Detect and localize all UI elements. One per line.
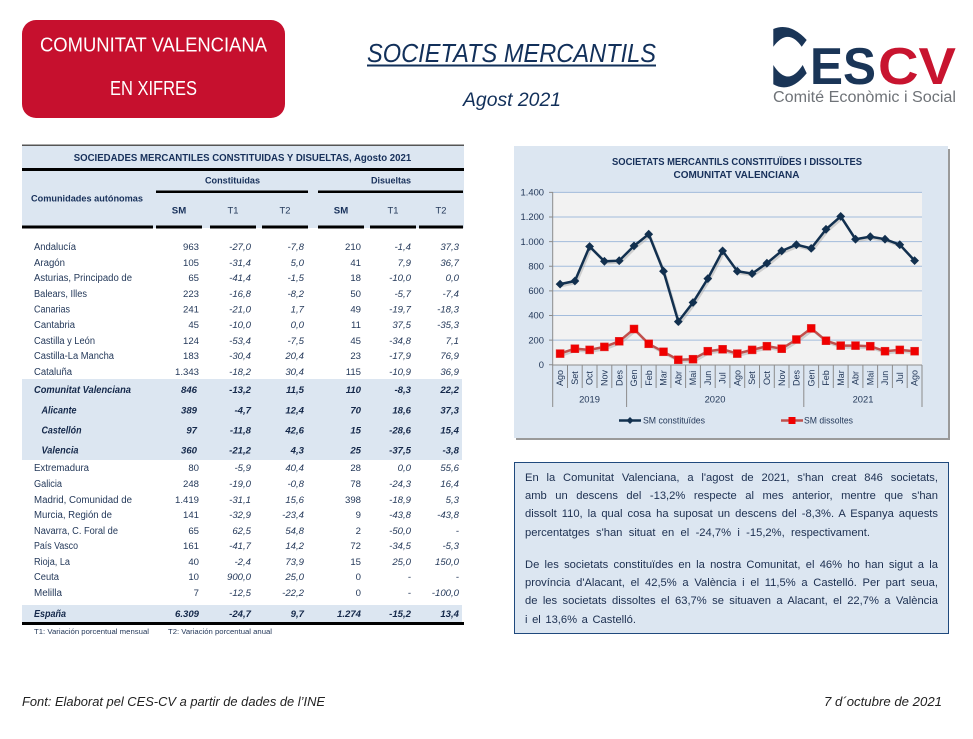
x axis year labels xyxy=(579,394,873,404)
row: Cantabria: -10,0 xyxy=(229,320,252,331)
row: País Vasco: 161 xyxy=(183,541,199,552)
row: Asturias: Asturias, Principado de xyxy=(34,273,132,284)
row: Galicia: 78 xyxy=(350,479,361,490)
row: Melilla: 7 xyxy=(194,588,199,599)
x axis month labels: Abr xyxy=(673,371,683,385)
y axis labels xyxy=(521,186,544,370)
logo: CES-CV xyxy=(773,27,956,106)
legend xyxy=(619,416,853,426)
row: Madrid: 5,3 xyxy=(446,495,460,506)
row: Murcia xyxy=(34,510,460,521)
row: Castellón: 15,4 xyxy=(440,426,460,436)
row: Aragón: 105 xyxy=(183,258,199,269)
row: Andalucía: Andalucía xyxy=(34,242,76,253)
row: Murcia: 141 xyxy=(183,510,199,521)
y axis labels: 1.000 xyxy=(521,236,544,247)
table header: SM xyxy=(334,206,348,216)
row: Balears: -7,4 xyxy=(442,289,459,300)
row: Madrid: 15,6 xyxy=(285,495,305,506)
text panel: commentary: i el 13,6% a Castelló. xyxy=(525,614,636,626)
y axis labels: 1.200 xyxy=(521,211,544,222)
row: Castellón: 97 xyxy=(186,426,198,436)
row: Canarias xyxy=(34,304,460,316)
row: Alicante: Alicante xyxy=(41,406,77,416)
table note: T2: Variación porcentual anual xyxy=(168,627,272,636)
row: Aragón: 7,9 xyxy=(398,258,412,269)
y axis labels: 600 xyxy=(528,285,544,296)
row: Comunitat Valenciana: 11,5 xyxy=(286,385,305,396)
row: Balears: 223 xyxy=(183,289,199,300)
row: Aragón: 41 xyxy=(350,258,361,269)
row: Navarra: - xyxy=(456,526,459,537)
row: Asturias: -41,4 xyxy=(229,273,251,284)
row: Galicia: 248 xyxy=(183,479,199,490)
row: Canarias: Canarias xyxy=(34,304,70,316)
row: Castilla y León xyxy=(34,336,459,347)
row: Ceuta: - xyxy=(456,572,459,583)
row: País Vasco: -41,7 xyxy=(229,541,252,552)
row: Castilla-La Mancha: 76,9 xyxy=(440,351,460,362)
y axis labels: 1.400 xyxy=(521,186,544,198)
row: Balears: -5,7 xyxy=(394,289,412,300)
row: Melilla xyxy=(34,588,460,599)
line series: SM dissolved xyxy=(560,328,916,362)
row: Ceuta xyxy=(34,572,459,583)
highlight band: España xyxy=(22,605,462,622)
row: España xyxy=(34,609,460,620)
row: Cataluña xyxy=(34,367,460,378)
x axis month labels: Jul xyxy=(895,372,905,384)
row: Valencia: -37,5 xyxy=(389,446,412,456)
x axis month labels: Mai xyxy=(865,371,875,385)
x axis month labels: Nov xyxy=(777,370,787,386)
row: Aragón xyxy=(34,258,460,269)
row: Castilla-La Mancha: 183 xyxy=(183,351,199,362)
row: Navarra: 2 xyxy=(356,526,361,537)
row: Alicante xyxy=(41,406,460,416)
row: Alicante: 70 xyxy=(350,406,362,416)
row: Ceuta: 900,0 xyxy=(227,572,252,583)
row: Cataluña: 30,4 xyxy=(285,367,304,378)
row: Melilla: Melilla xyxy=(34,588,62,599)
row: Ceuta: 10 xyxy=(188,572,199,583)
text panel: commentary: de les societats dissoltes el 63,7% se situaven a Alacant, el 22,7% a València xyxy=(525,595,938,607)
row: Murcia: -43,8 xyxy=(437,510,460,521)
header badge: Comunitat Valenciana en xifres xyxy=(22,20,285,118)
row: Comunitat Valenciana xyxy=(34,385,460,396)
row: Rioja: 40 xyxy=(188,557,199,568)
plot area xyxy=(553,192,922,365)
row: Canarias: -21,0 xyxy=(229,304,252,316)
row: Castellón xyxy=(42,426,460,436)
row: Andalucía: -1,4 xyxy=(394,242,411,253)
line series: SM constituted xyxy=(560,216,916,324)
row: Extremadura xyxy=(34,463,460,474)
x axis month labels: Nov xyxy=(600,370,610,386)
footer: source: Font: Elaborat pel CES-CV a partir de dades de l’INE xyxy=(22,694,325,709)
chart title xyxy=(612,157,862,181)
x axis month labels: Jun xyxy=(703,371,713,385)
row: Navarra: -50,0 xyxy=(389,526,412,537)
y axis labels: 800 xyxy=(528,260,544,272)
row: Rioja: 73,9 xyxy=(285,557,305,568)
row: Cantabria: 0,0 xyxy=(291,320,305,331)
text panel: commentary: De les societats constituïdes en la nostra Comunitat, el 46% ho han sigut a la xyxy=(525,559,938,571)
row: Murcia: 9 xyxy=(356,510,361,521)
x axis month labels: Set xyxy=(747,371,757,385)
text panel: commentary: amb un descens del -13,2% respecte al mes anterior, mentre que s'han xyxy=(525,490,938,502)
x axis month labels: Oct xyxy=(762,371,772,385)
row: Ceuta: - xyxy=(408,572,411,583)
row: Castilla y León: 7,1 xyxy=(446,336,459,347)
logo: CES-CV: Comité Econòmic i Social xyxy=(773,89,956,106)
x axis month labels xyxy=(555,369,920,387)
table header: SOCIEDADES MERCANTILES CONSTITUIDAS Y DISUELTAS, Agosto 2021 xyxy=(74,153,411,164)
row: Madrid: 1.419 xyxy=(175,495,199,506)
row: Cataluña: 36,9 xyxy=(440,367,460,378)
row: Rioja: 150,0 xyxy=(435,557,460,568)
y axis labels: 400 xyxy=(528,310,544,321)
row: Andalucía: -7,8 xyxy=(287,242,305,253)
row: Valencia xyxy=(42,446,460,456)
row: Valencia: Valencia xyxy=(42,446,79,456)
x axis month labels: Des xyxy=(614,370,624,386)
row: España: 1.274 xyxy=(337,609,362,620)
logo: CES-CV: ES xyxy=(810,38,876,96)
table header: Disueltas xyxy=(371,176,411,186)
row: Castellón: Castellón xyxy=(42,426,82,436)
table panel: sociedades mercantiles xyxy=(22,144,464,636)
row: Extremadura: 55,6 xyxy=(440,463,460,474)
x axis month labels: Gen xyxy=(629,369,639,387)
bottom rule xyxy=(22,622,464,625)
row: España: -15,2 xyxy=(389,609,412,620)
row: Andalucía xyxy=(34,242,460,253)
legend: SM constituïdes xyxy=(643,416,705,426)
row: Aragón: -31,4 xyxy=(229,258,251,269)
row: Cantabria xyxy=(34,320,460,331)
row: Ceuta: 0 xyxy=(356,572,361,583)
row: Cantabria: Cantabria xyxy=(34,320,75,331)
row: Rioja: 15 xyxy=(350,557,361,568)
row: Alicante: 18,6 xyxy=(392,406,412,416)
row: Extremadura: 28 xyxy=(350,463,361,474)
row: Galicia: -24,3 xyxy=(389,479,412,490)
y axis labels: 200 xyxy=(528,334,544,345)
row: Canarias: -19,7 xyxy=(389,304,412,316)
row: Madrid: -31,1 xyxy=(229,495,251,506)
text panel: commentary: En la Comunitat Valenciana, a l'agost de 2021, s'han creat 846 societats, xyxy=(525,472,938,484)
row: Alicante: 37,3 xyxy=(440,406,460,416)
row: Cataluña: 115 xyxy=(346,367,361,378)
y axis labels: 0 xyxy=(539,359,544,370)
row: Cataluña: -18,2 xyxy=(229,367,252,378)
legend: SM dissoltes xyxy=(804,416,853,426)
row: Madrid: Madrid, Comunidad de xyxy=(34,495,132,506)
x axis month labels: Mar xyxy=(836,370,846,386)
row: Extremadura: 40,4 xyxy=(285,463,304,474)
row: Balears: -16,8 xyxy=(229,289,252,300)
row: Castellón: 42,6 xyxy=(284,426,305,436)
row: Extremadura: 80 xyxy=(188,463,199,474)
row: Aragón: 36,7 xyxy=(440,258,460,269)
row: Extremadura: 0,0 xyxy=(398,463,412,474)
x axis month labels: Set xyxy=(570,371,580,385)
row: Cantabria: 37,5 xyxy=(392,320,412,331)
row: Ceuta: Ceuta xyxy=(34,572,59,583)
x axis year labels: 2020 xyxy=(705,394,725,404)
row: Canarias: 1,7 xyxy=(291,304,305,316)
table header: T2 xyxy=(436,204,446,216)
row: Asturias: -1,5 xyxy=(287,273,305,284)
row: Murcia: -32,9 xyxy=(229,510,252,521)
chart panel: societats constituïdes i dissoltes xyxy=(514,146,950,440)
row: Castilla-La Mancha: -30,4 xyxy=(229,351,251,362)
table header xyxy=(22,144,464,228)
table header: SM xyxy=(172,206,186,216)
x axis month labels: Gen xyxy=(806,369,816,387)
main title: SOCIETATS MERCANTILS xyxy=(367,38,657,68)
row: Alicante: 12,4 xyxy=(285,406,305,416)
text panel: commentary: percentatges s'han situat en el -24,7% i -15,2%, respectivament. xyxy=(525,527,870,539)
row: Valencia: 4,3 xyxy=(290,446,305,456)
row: Castilla y León: -53,4 xyxy=(229,336,251,347)
row: Comunitat Valenciana: Comunitat Valenciana xyxy=(34,385,131,396)
row: Rioja: 25,0 xyxy=(391,557,412,568)
row: Comunitat Valenciana: 846 xyxy=(181,385,198,396)
row: Madrid xyxy=(34,495,460,506)
row: Castilla y León: -34,8 xyxy=(389,336,412,347)
row: Navarra xyxy=(34,526,459,537)
text panel: commentary xyxy=(514,462,949,634)
row: Andalucía: 210 xyxy=(345,242,361,253)
row: Castellón: 15 xyxy=(350,426,362,436)
text panel: commentary: dissolt 110, la qual cosa ha suposat un descens del -8,3%. A Espanya aquests xyxy=(525,508,938,520)
row: Galicia: 16,4 xyxy=(440,479,459,490)
row: Canarias: -18,3 xyxy=(437,304,460,316)
x axis month labels: Jul xyxy=(718,372,728,384)
chart title: COMUNITAT VALENCIANA xyxy=(674,170,800,181)
row: Melilla: -22,2 xyxy=(282,588,305,599)
row: Rioja: -2,4 xyxy=(234,557,251,568)
row: Castilla-La Mancha: -17,9 xyxy=(389,351,412,362)
row: Rioja xyxy=(34,557,460,568)
table note xyxy=(34,627,272,636)
table header: Comunidades autónomas xyxy=(31,194,143,204)
row: Castilla y León: 124 xyxy=(183,336,200,347)
row: Madrid: -18,9 xyxy=(389,495,412,506)
row: Castilla y León: 45 xyxy=(350,336,361,347)
row: Alicante: -4,7 xyxy=(234,406,252,416)
x axis month labels: Des xyxy=(792,370,802,386)
row: Extremadura: Extremadura xyxy=(34,463,89,474)
logo: CES-CV: CV xyxy=(878,38,956,96)
row: País Vasco: 14,2 xyxy=(285,541,305,552)
row: Valencia: 25 xyxy=(349,446,362,456)
x axis month labels: Ago xyxy=(555,370,565,386)
row: Murcia: Murcia, Región de xyxy=(34,510,112,521)
x axis month labels: Jun xyxy=(880,371,890,385)
x axis month labels: Feb xyxy=(821,370,831,386)
row: Galicia: -0,8 xyxy=(287,479,305,490)
row: País Vasco: País Vasco xyxy=(34,541,78,552)
row: Castilla-La Mancha: Castilla-La Mancha xyxy=(34,351,114,362)
x axis year labels: 2021 xyxy=(853,394,873,404)
row: Balears: Balears, Illes xyxy=(34,289,87,300)
row: País Vasco: -34,5 xyxy=(389,541,412,552)
text panel: commentary: província d'Alacant, el 42,5% a València i el 11,5% a Castelló. Per part seua, xyxy=(525,577,938,589)
row: Cataluña: 1.343 xyxy=(175,367,199,378)
row: España: 6.309 xyxy=(175,609,200,620)
row: Rioja: Rioja, La xyxy=(34,557,70,568)
row: España: 9,7 xyxy=(291,609,305,620)
row: Cataluña: -10,9 xyxy=(389,367,412,378)
row: Aragón: 5,0 xyxy=(291,258,305,269)
table note: T1: Variación porcentual mensual xyxy=(34,627,149,636)
row: Cataluña: Cataluña xyxy=(34,367,72,378)
x axis month labels: Mar xyxy=(659,370,669,386)
row: Cantabria: 45 xyxy=(188,320,199,331)
row: Castilla y León: -7,5 xyxy=(287,336,305,347)
row: España: España xyxy=(34,609,66,620)
row: Asturias xyxy=(34,273,460,284)
row: Cantabria: 11 xyxy=(351,320,361,331)
row: Alicante: 389 xyxy=(181,406,198,416)
row: Balears: 50 xyxy=(350,289,361,300)
row: Comunitat Valenciana: 22,2 xyxy=(439,385,460,396)
table header: Constituidas xyxy=(205,176,260,186)
header badge: Comunitat Valenciana en xifres: EN XIFRES xyxy=(110,78,197,100)
row: Andalucía: 37,3 xyxy=(440,242,460,253)
subtitle: date: Agost 2021 xyxy=(462,90,561,111)
row: Castellón: -28,6 xyxy=(389,426,412,436)
x axis month labels: Feb xyxy=(644,370,654,386)
row: País Vasco: 72 xyxy=(350,541,361,552)
row: Melilla: -12,5 xyxy=(229,588,252,599)
row: Andalucía: -27,0 xyxy=(229,242,252,253)
row: Navarra: 62,5 xyxy=(232,526,252,537)
row: España: -24,7 xyxy=(229,609,252,620)
row: Valencia: -21,2 xyxy=(229,446,252,456)
table header: T1 xyxy=(388,204,398,216)
row: País Vasco xyxy=(34,541,460,552)
x axis month labels: Abr xyxy=(851,371,861,385)
table header: T1 xyxy=(228,204,238,216)
row: Murcia: -43,8 xyxy=(389,510,412,521)
row: Galicia: Galicia xyxy=(34,479,62,490)
row: Galicia xyxy=(34,479,459,490)
row: Castellón: -11,8 xyxy=(230,426,252,436)
row: Navarra: Navarra, C. Foral de xyxy=(34,526,118,537)
row: Castilla-La Mancha xyxy=(34,351,460,362)
highlight band: Comunitat Valenciana xyxy=(22,379,462,460)
table header: T2 xyxy=(280,204,290,216)
row: España: 13,4 xyxy=(440,609,460,620)
row: Valencia: 360 xyxy=(181,446,198,456)
row: Canarias: 49 xyxy=(350,304,361,316)
row: Asturias: 18 xyxy=(350,273,361,284)
row: Murcia: -23,4 xyxy=(282,510,304,521)
header badge: Comunitat Valenciana en xifres: COMUNITAT VALENCIANA xyxy=(40,34,268,56)
row: Valencia: -3,8 xyxy=(442,446,460,456)
row: Galicia: -19,0 xyxy=(229,479,252,490)
row: Asturias: 65 xyxy=(188,273,199,284)
row: Madrid: 398 xyxy=(345,495,361,506)
row: Extremadura: -5,9 xyxy=(234,463,252,474)
row: Melilla: 0 xyxy=(356,588,361,599)
row: Melilla: -100,0 xyxy=(432,588,460,599)
row: Navarra: 54,8 xyxy=(285,526,305,537)
footer: date: 7 d´octubre de 2021 xyxy=(824,694,942,709)
row: Balears: -8,2 xyxy=(287,289,305,300)
chart title: SOCIETATS MERCANTILS CONSTITUÏDES I DISSOLTES xyxy=(612,157,862,168)
row: Aragón: Aragón xyxy=(34,258,65,269)
x axis year labels: 2019 xyxy=(579,394,600,404)
row: Andalucía: 963 xyxy=(183,242,199,253)
row: Castilla y León: Castilla y León xyxy=(34,336,95,347)
row: Asturias: -10,0 xyxy=(389,273,412,284)
row: Castilla-La Mancha: 23 xyxy=(350,351,361,362)
x axis month labels: Ago xyxy=(910,370,920,386)
row: Comunitat Valenciana: -13,2 xyxy=(229,385,252,396)
row: Balears xyxy=(34,289,459,300)
row: Comunitat Valenciana: -8,3 xyxy=(394,385,412,396)
row: Comunitat Valenciana: 110 xyxy=(346,385,362,396)
row: Asturias: 0,0 xyxy=(446,273,460,284)
row: Cantabria: -35,3 xyxy=(437,320,460,331)
x axis month labels: Ago xyxy=(732,370,742,386)
row: Navarra: 65 xyxy=(188,526,199,537)
x axis month labels: Oct xyxy=(585,371,595,385)
x axis month labels: Mai xyxy=(688,371,698,385)
row: Castilla-La Mancha: 20,4 xyxy=(284,351,304,362)
row: Ceuta: 25,0 xyxy=(284,572,305,583)
row: Melilla: - xyxy=(408,588,411,599)
row: País Vasco: -5,3 xyxy=(442,541,460,552)
row: Canarias: 241 xyxy=(183,304,199,316)
